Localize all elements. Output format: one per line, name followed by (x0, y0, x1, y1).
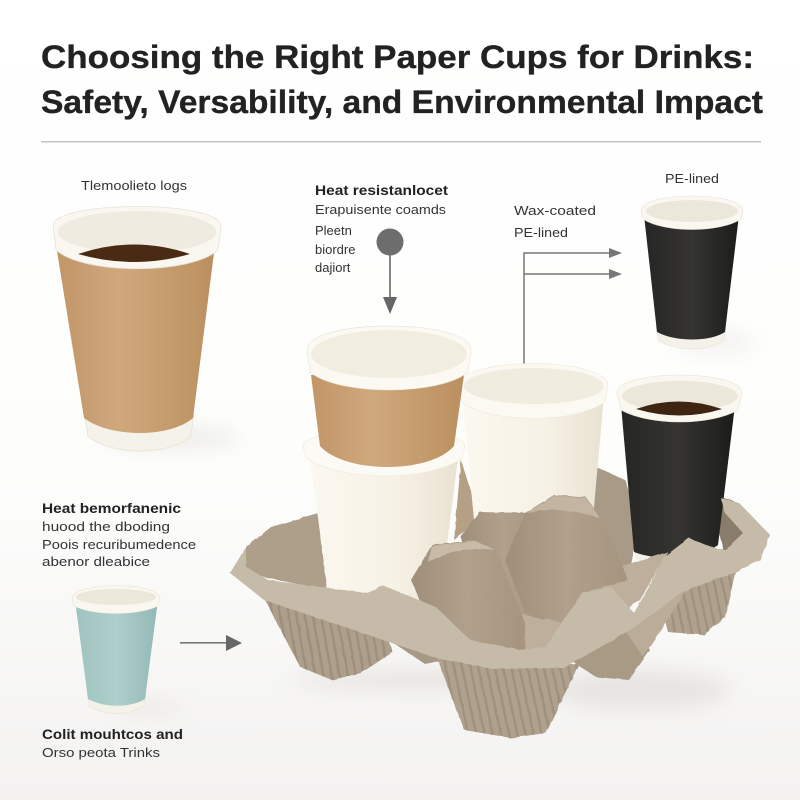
arrow: teal cup to tray (180, 635, 242, 651)
text block: heat performance (42, 501, 196, 569)
tray floor (515, 552, 668, 652)
text block: heat performance: Heat bemorfanenic (42, 501, 182, 516)
label: thermal logs: Tlemoolieto logs (81, 179, 187, 193)
text block: heat resistance: dajiort (315, 260, 351, 275)
text block: heat resistance: biordre (315, 242, 355, 257)
text block: cold drinks: Orso peota Trinks (42, 745, 161, 760)
centre pillar (505, 495, 628, 623)
icon: white cup holding kraft cup (303, 326, 471, 600)
text block: cold drinks (42, 727, 183, 760)
label: coating types: Wax-coated (514, 203, 596, 218)
text block: heat performance: abenor dleabice (42, 554, 150, 569)
tray legs (264, 598, 393, 680)
icon: black cup in tray (617, 375, 742, 571)
icon: marker and down arrow (376, 228, 404, 314)
tray back pieces (243, 460, 770, 590)
front rim (230, 498, 770, 669)
icon: cream cup in tray (459, 364, 608, 530)
label: coating types: PE-lined (514, 225, 568, 240)
text block: heat resistance: Pleetn (315, 223, 352, 238)
text block: heat performance: Poois recuribumedence (42, 537, 196, 552)
text block: heat resistance: Erapuisente coamds (315, 202, 447, 217)
text block: cold drinks: Colit mouhtcos and (42, 727, 183, 742)
back pillar (461, 512, 545, 620)
front pillar (411, 540, 525, 650)
title: Choosing the Right Paper Cups for Drinks: (41, 39, 754, 75)
text block: heat resistance: Heat resistanlocet (315, 183, 449, 198)
label: coating types (514, 203, 596, 240)
icon: teal cup (72, 586, 185, 714)
arrows: coating pointers (524, 248, 622, 372)
tray shadow (290, 670, 730, 710)
title: Safety, Versability, and Environmental Impact (41, 84, 763, 120)
text block: heat resistance (315, 183, 449, 275)
text block: heat performance: huood the dboding (42, 519, 170, 534)
title (41, 39, 763, 120)
icon: molded pulp cup carrier (230, 495, 770, 738)
icon: black cup top right (641, 196, 755, 349)
icon: kraft paper cup with coffee (53, 206, 240, 451)
label: PE-lined: PE-lined (665, 171, 719, 186)
